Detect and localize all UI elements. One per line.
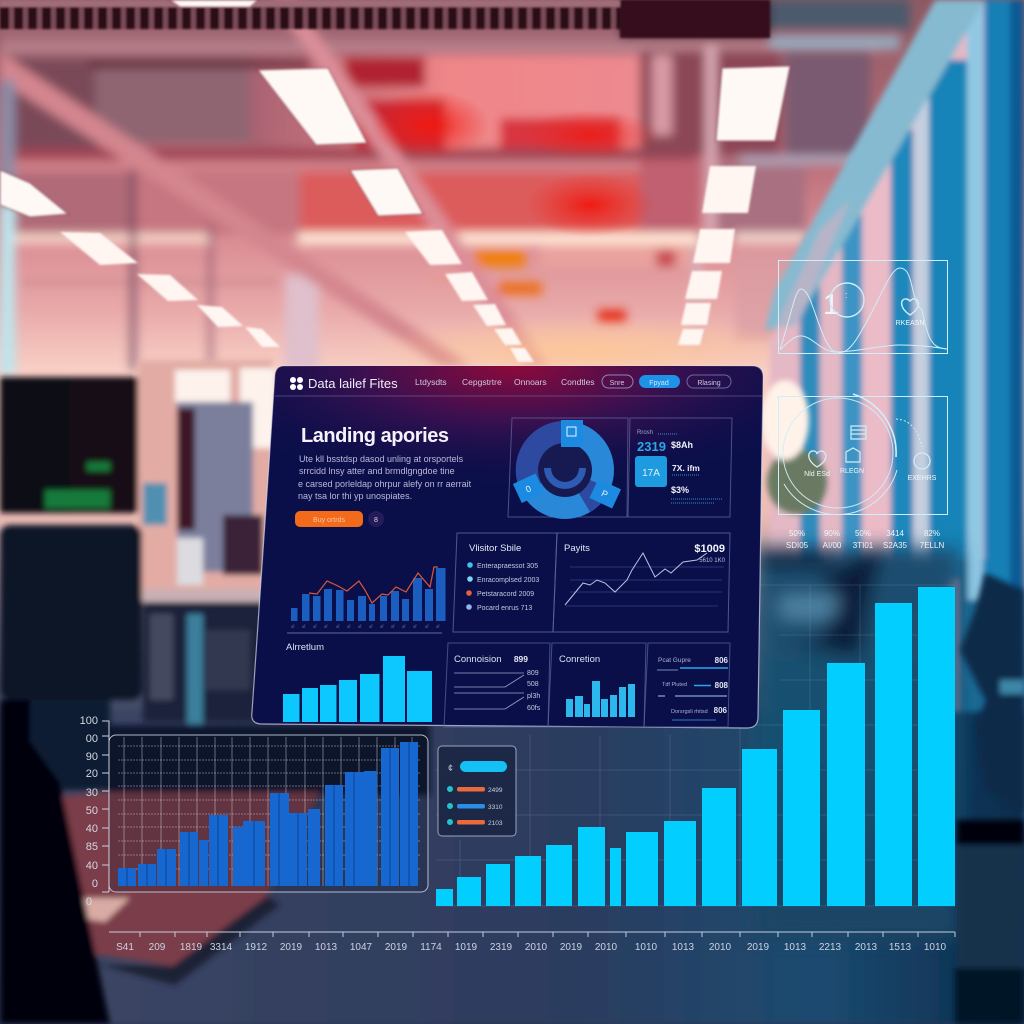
progress lines card: 806: [714, 706, 728, 715]
y axis labels: 00: [86, 733, 98, 745]
visitor card: Enracomplsed 2003: [477, 577, 539, 584]
visitor card: Petstaracord 2009: [477, 591, 534, 598]
stats card: Rrosh: [637, 430, 653, 436]
holographic circle diagram: [778, 394, 948, 515]
holographic stat row: AI/00: [823, 541, 842, 550]
stats card: $3%: [671, 485, 689, 495]
holographic stat row: 3414: [886, 529, 904, 538]
bottom timeline axis: 1013: [784, 942, 807, 953]
hero paragraph: nay tsa lor thi yp unospiates.: [298, 491, 412, 501]
bottom timeline axis: S41: [116, 942, 134, 953]
top-right holographic line chart: :: [845, 290, 848, 300]
header: Rlasing: [697, 380, 721, 387]
legend card: [438, 746, 516, 836]
stats card: [628, 418, 732, 517]
legend card: 2499: [488, 787, 503, 794]
attention bar chart: [283, 642, 432, 722]
y axis labels: 100: [80, 715, 98, 727]
holographic circle diagram: RLEGN: [840, 468, 864, 475]
y axis labels: [80, 715, 98, 908]
holographic stat row: [786, 529, 944, 550]
progress lines card: Tdf Pluted: [662, 682, 687, 688]
stats card: 2319: [637, 439, 666, 454]
bottom timeline axis: 2019: [747, 942, 770, 953]
header: Condtles: [561, 377, 595, 387]
payments line chart card: Payits: [564, 543, 590, 554]
visitor card: Vlisitor Sbile: [469, 543, 521, 554]
mini bar and line chart: xf: [402, 624, 406, 629]
conversion lines card: 809: [527, 670, 539, 677]
bottom timeline axis: 209: [149, 942, 166, 953]
conversion lines card: pl3h: [527, 693, 540, 700]
mini bar and line chart: xf: [302, 624, 306, 629]
bottom timeline axis: 2213: [819, 942, 842, 953]
stats card: $8Ah: [671, 440, 693, 450]
bottom timeline axis: 1013: [315, 942, 338, 953]
attention bar chart: Alrretlum: [286, 642, 324, 653]
bottom timeline axis: 2010: [525, 942, 548, 953]
header: Data lailef Fites: [308, 376, 398, 391]
icon: heart: [902, 299, 919, 315]
donut chart card: 0: [524, 483, 533, 494]
bottom timeline axis: 3314: [210, 942, 233, 953]
icon: logo: [290, 377, 303, 390]
progress lines card: 808: [715, 681, 729, 690]
bottom timeline axis: 2013: [855, 942, 878, 953]
bottom timeline axis: 1513: [889, 942, 912, 953]
bottom timeline axis: 1010: [924, 942, 947, 953]
conversion lines card: Connoision: [454, 654, 502, 665]
mini bar and line chart: xf: [425, 624, 429, 629]
bottom timeline axis: 2019: [385, 942, 408, 953]
mini bar and line chart: xf: [347, 624, 351, 629]
holographic circle diagram: EXEHRS: [908, 475, 937, 482]
holographic stat row: SDI05: [786, 541, 809, 550]
bottom timeline axis: 2010: [595, 942, 618, 953]
progress lines card: Dorsrgsli rhitsd: [671, 709, 708, 715]
mini bar and line chart: xf: [413, 624, 417, 629]
legend card: 2103: [488, 820, 503, 827]
conversion lines card: 899: [514, 654, 528, 664]
orange button: Buy ortrds: [313, 517, 345, 524]
y axis labels: 20: [86, 768, 98, 780]
holographic stat row: S2A35: [883, 541, 908, 550]
bottom timeline axis: 2019: [280, 942, 303, 953]
office furniture: [0, 360, 1024, 1024]
y axis labels: 0: [92, 878, 98, 890]
icon: folder: [846, 448, 860, 462]
legend card: ¢: [448, 763, 453, 773]
visitor card: Enterapraessot 305: [477, 563, 538, 570]
donut chart card: [508, 418, 628, 519]
panel: dashboard: [252, 366, 763, 728]
mini bar and line chart: xf: [313, 624, 317, 629]
bottom timeline axis: 1010: [635, 942, 658, 953]
y axis labels: 30: [86, 787, 98, 799]
y axis labels: 90: [86, 751, 98, 763]
holographic stat row: 50%: [789, 529, 805, 538]
bottom timeline axis: 2010: [709, 942, 732, 953]
conversion bars card: Conretion: [559, 654, 600, 665]
large cyan bar chart: [436, 585, 955, 906]
icon: heart small: [809, 451, 826, 467]
top-right holographic line chart: [778, 260, 948, 354]
holographic stat row: 3TI01: [853, 541, 874, 550]
bottom timeline axis: 1047: [350, 942, 373, 953]
conversion lines card: [444, 643, 550, 727]
bottom timeline axis: 1819: [180, 942, 203, 953]
right rear office: [755, 545, 960, 938]
hero paragraph: [298, 454, 472, 501]
visitor card: Pocard enrus 713: [477, 605, 532, 612]
mini bar and line chart: xf: [291, 624, 295, 629]
payments line chart card: 5610 1K0: [699, 558, 726, 564]
progress lines card: [644, 643, 730, 727]
stats card: 7X. ifm: [672, 463, 700, 473]
mini bar and line chart: xf: [380, 624, 384, 629]
orange button: [295, 511, 384, 527]
big number: 1: [823, 289, 839, 321]
icon: database: [851, 426, 866, 439]
bottom timeline axis: [109, 932, 955, 953]
conversion lines card: 60fs: [527, 705, 541, 712]
bottom timeline axis: 1013: [672, 942, 695, 953]
conversion lines card: 508: [527, 681, 539, 688]
bottom timeline axis: 2319: [490, 942, 513, 953]
ceiling grille: [0, 0, 770, 38]
progress lines card: 806: [715, 656, 729, 665]
payments line chart card: [553, 533, 730, 632]
visitor card: [453, 533, 557, 632]
right windows: [765, 0, 1024, 830]
conversion bars card: [548, 643, 646, 727]
y axis labels: 40: [86, 823, 98, 835]
top-right holographic line chart: RKEASN: [896, 320, 924, 327]
y axis labels: 85: [86, 841, 98, 853]
progress lines card: Pcat Gupre: [658, 657, 691, 664]
hero paragraph: e carsed porleldap ohrpur alefy on rr aerrait: [298, 479, 472, 489]
header: Ltdysdts: [415, 377, 447, 387]
orange button: 8: [374, 517, 378, 524]
mini bar and line chart: xf: [369, 624, 373, 629]
legend card: 3310: [488, 804, 503, 811]
mini bar and line chart: xf: [324, 624, 328, 629]
mini bar and line chart: xf: [358, 624, 362, 629]
hero paragraph: Ute kll bsstdsp dasod unling at orsportels: [299, 454, 464, 464]
hero heading: Landing apories: [301, 425, 449, 447]
left blue bar chart panel: [80, 715, 428, 908]
y axis labels: 40: [86, 860, 98, 872]
holographic stat row: 90%: [824, 529, 840, 538]
holographic circle diagram: Nld ESd: [804, 471, 830, 478]
y axis labels: 50: [86, 805, 98, 817]
mini bar and line chart: xf: [391, 624, 395, 629]
bottom timeline axis: 1019: [455, 942, 478, 953]
ceiling trusses: [0, 0, 910, 375]
hero paragraph: srrcidd lnsy atter and brmdlgngdoe tine: [299, 466, 455, 476]
header: Onnoars: [514, 377, 547, 387]
header: Cepgstrtre: [462, 377, 502, 387]
mini bar and line chart: xf: [436, 624, 440, 629]
ceiling lights: [0, 0, 790, 217]
stats card: 17A: [642, 468, 660, 479]
holographic stat row: 7ELLN: [920, 541, 944, 550]
bottom timeline axis: 2019: [560, 942, 583, 953]
mini bar and line chart: [287, 567, 446, 633]
bottom timeline axis: 1912: [245, 942, 268, 953]
holographic stat row: 82%: [924, 529, 940, 538]
header: Fpyad: [649, 380, 669, 387]
bottom timeline axis: 1174: [420, 942, 442, 953]
holographic stat row: 50%: [855, 529, 871, 538]
header: [290, 375, 731, 391]
header: Snre: [610, 380, 624, 387]
mini bar and line chart: xf: [336, 624, 340, 629]
donut chart card: P: [600, 488, 609, 500]
y axis labels: 0: [86, 896, 92, 908]
payments line chart card: $1009: [694, 543, 725, 555]
floor: [0, 712, 1024, 1024]
